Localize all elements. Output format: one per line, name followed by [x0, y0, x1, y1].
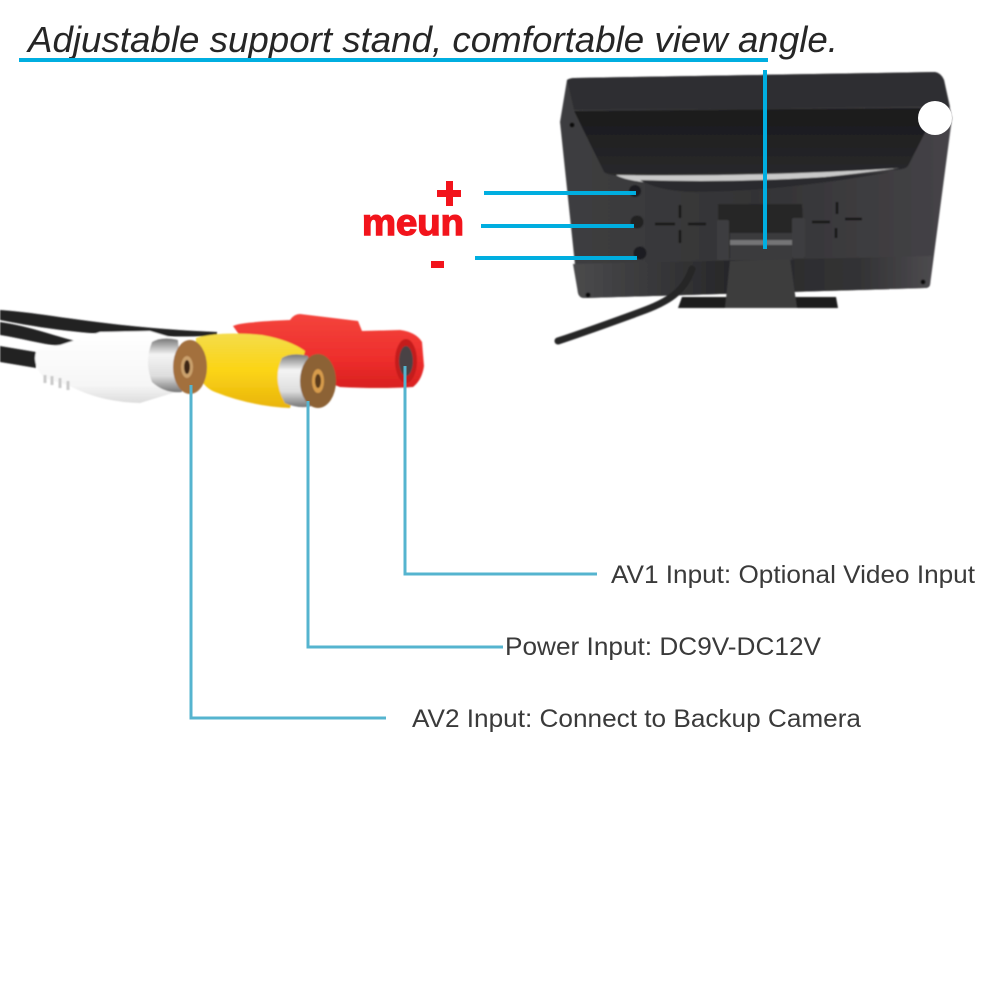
- arrow: stand pointer: [763, 70, 767, 249]
- red connector: [233, 314, 424, 388]
- arrow: plus button: [484, 191, 636, 195]
- arrow: minus button: [475, 256, 637, 260]
- monitor housing: [560, 72, 952, 298]
- RCA connectors photo: [0, 310, 424, 408]
- cable: [558, 269, 692, 341]
- monitor rear photo: [558, 72, 952, 341]
- button plus: [629, 185, 641, 197]
- button minus: [634, 246, 646, 260]
- top face: [567, 72, 950, 110]
- highlight strip: [616, 168, 900, 186]
- black cables: [0, 310, 217, 368]
- title underline: [19, 58, 768, 62]
- label: meun: meun: [362, 202, 464, 243]
- monitor lower band: [573, 256, 932, 298]
- yellow connector: [196, 334, 336, 408]
- stand hinge: [718, 204, 805, 258]
- label: AV2 input: AV2 Input: Connect to Backup Camera: [412, 705, 861, 733]
- lower highlight shadow: [640, 172, 890, 192]
- arrow: menu button: [481, 224, 634, 228]
- leader line: AV1: [405, 366, 597, 574]
- white dot: [918, 101, 952, 135]
- title: Adjustable support stand, comfortable view angle.: [26, 19, 838, 60]
- label: power input: Power Input: DC9V-DC12V: [505, 633, 821, 661]
- label: plus: [437, 181, 461, 206]
- monitor upper recess: [574, 108, 934, 176]
- label: AV1 input: AV1 Input: Optional Video Input: [611, 561, 975, 589]
- button menu: [630, 216, 644, 228]
- leader line: power: [308, 401, 503, 647]
- leader line: AV2: [191, 385, 386, 718]
- vesa slots left: [655, 205, 706, 243]
- screws: [572, 125, 923, 295]
- label: minus: [431, 261, 444, 268]
- vesa slots right: [812, 202, 862, 238]
- white connector: [35, 331, 207, 403]
- monitor stand base: [678, 297, 838, 308]
- stand arm: [725, 259, 797, 308]
